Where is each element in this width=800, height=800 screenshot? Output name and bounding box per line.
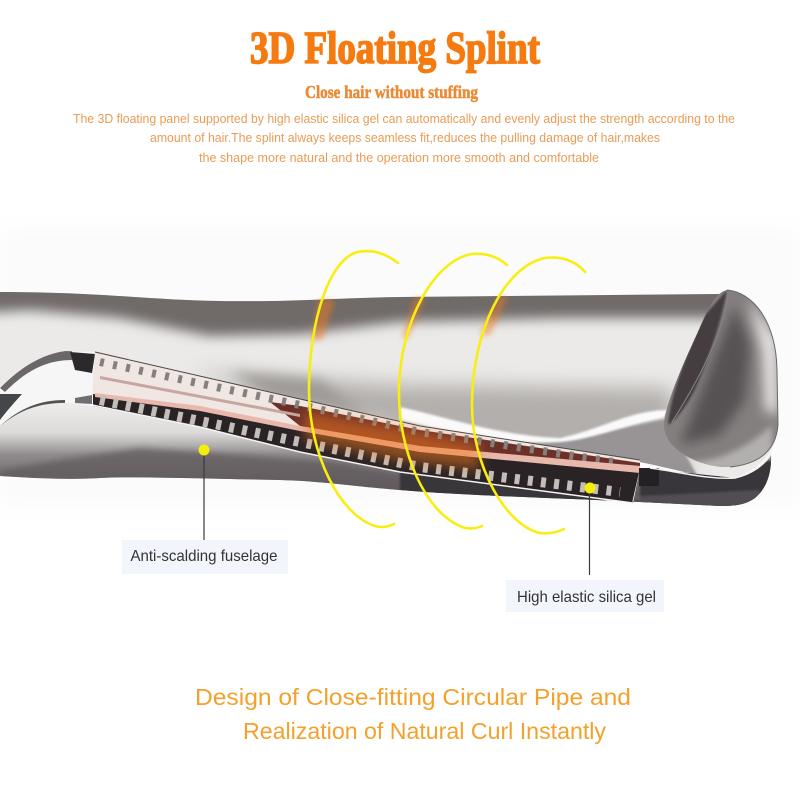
callout: anti-scalding fuselage	[122, 444, 288, 574]
description text: amount of hair.The splint always keeps seamless fit,reduces the pulling damage of hair,makes	[150, 131, 660, 145]
upper plate teeth	[100, 362, 620, 463]
callout label: High elastic silica gel	[517, 589, 656, 606]
ring 3	[472, 258, 585, 533]
description text: the shape more natural and the operation more smooth and comfortable	[199, 151, 599, 165]
callout label	[506, 580, 664, 612]
lower right grey	[530, 420, 698, 474]
callout label	[122, 540, 288, 574]
subtitle: Close hair without stuffing	[305, 82, 478, 102]
title: 3D Floating Splint	[250, 22, 541, 73]
highlight stroke	[400, 407, 668, 443]
plate end block	[639, 468, 659, 486]
head outline	[727, 290, 778, 467]
top dark band	[0, 292, 765, 345]
callout: high elastic silica gel	[506, 482, 664, 612]
ring 2	[399, 254, 507, 528]
head cap	[664, 290, 778, 467]
white seam under head	[650, 453, 771, 478]
bottom caption: Realization of Natural Curl Instantly	[243, 718, 607, 744]
description text: The 3D floating panel supported by high elastic silica gel can automatically and evenly adjust the strength according to the	[73, 112, 735, 126]
upper plate band	[92, 352, 640, 470]
upper shell	[0, 292, 776, 478]
maroon wedge	[270, 402, 640, 470]
orange heat glow	[305, 297, 508, 470]
left metal tongs and inner gap	[0, 345, 110, 435]
white edge line	[92, 405, 633, 503]
left lower tint	[230, 372, 370, 415]
yellow rings	[309, 251, 585, 533]
pink rubber strip	[95, 393, 640, 473]
lower shell	[0, 400, 800, 510]
description text	[73, 112, 735, 165]
lower plate base	[93, 394, 640, 503]
callout label: Anti-scalding fuselage	[130, 548, 278, 565]
ring 1	[309, 251, 398, 527]
heated plates	[92, 352, 659, 503]
lower grey slope	[190, 372, 690, 480]
callout dot and leader	[198, 444, 210, 540]
bottom caption	[195, 684, 631, 744]
callout dot and leader	[584, 482, 596, 575]
bottom caption: Design of Close-fitting Circular Pipe and	[195, 684, 631, 710]
lower plate teeth	[100, 400, 620, 492]
hair straightener illustration	[0, 290, 778, 506]
